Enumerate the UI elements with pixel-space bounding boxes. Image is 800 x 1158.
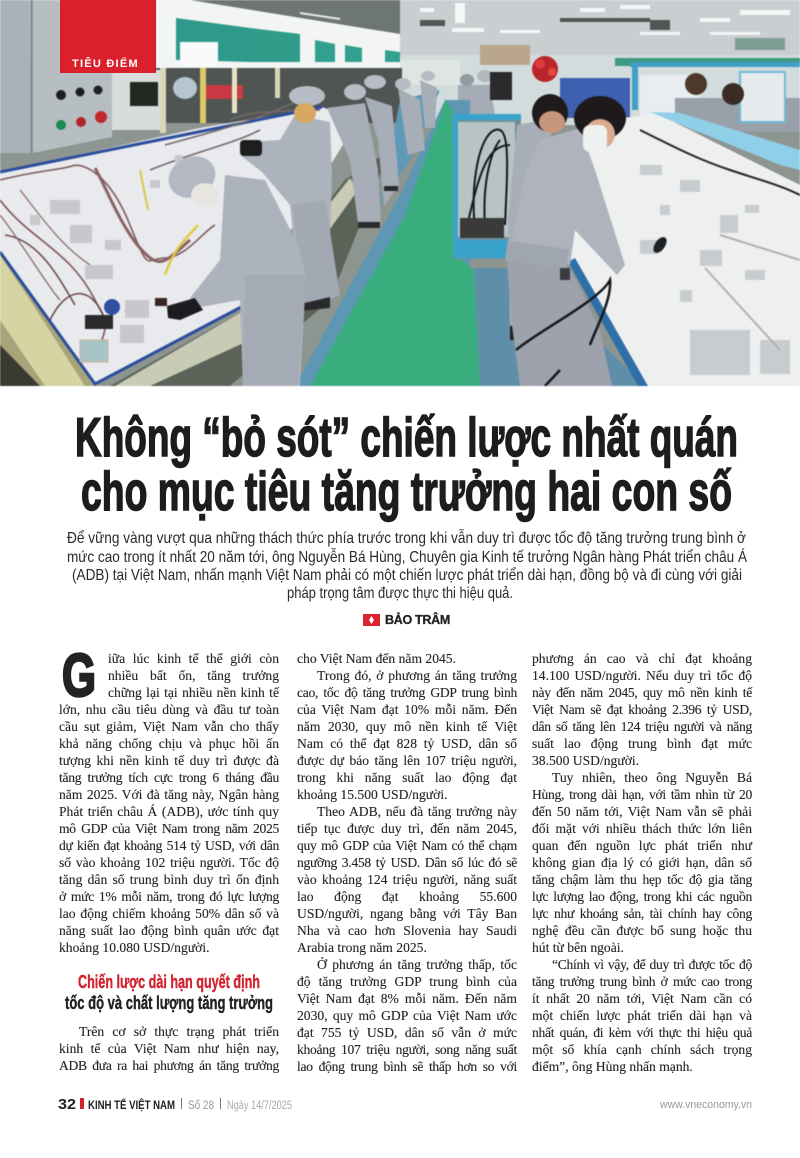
footer bbox=[58, 1096, 752, 1113]
article column 2: Việt Nam đạt 8% mỗi năm. Đến năm bbox=[297, 991, 517, 1006]
article column 1: dự kiến đạt khoảng 514 tỷ USD, với dân bbox=[59, 838, 279, 853]
article column 1: năng suất lao động bình quân ước đạt bbox=[59, 923, 279, 938]
article column 3: lực như khoáng sản, tài chính hay công bbox=[532, 906, 752, 921]
article column 3: tăng chậm làm thu hẹp tốc độ gia tăng bbox=[532, 872, 752, 887]
article column 1: tăng dân số trung bình duy trì ổn định bbox=[59, 872, 279, 887]
article column 3: phương án cao và chỉ đạt khoảng bbox=[532, 651, 752, 666]
article column 1: mô GDP của Việt Nam trong năm 2025 bbox=[59, 821, 279, 836]
article column 2: quy mô GDP của Việt Nam có thể chạm bbox=[297, 838, 517, 853]
article column 1: năm 2025. Với đà tăng này, Ngân hàng bbox=[59, 787, 279, 802]
footer: www.vneconomy.vn bbox=[659, 1099, 752, 1111]
article column 2: USD/người, ngang bằng với Tây Ban bbox=[297, 906, 517, 921]
article column 2: lao động đạt khoảng 55.600 bbox=[297, 889, 517, 904]
article column 3: suất lao động trung bình đạt mức bbox=[532, 736, 752, 751]
article column 2: Theo ADB, nếu đà tăng trưởng này bbox=[317, 804, 517, 819]
article column 2: lao động trung bình sẽ thấp hơn so với bbox=[297, 1059, 517, 1074]
article column 1: số vào khoảng 102 triệu người. Tốc độ bbox=[59, 855, 279, 870]
article column 2: Nha và cao hơn Slovenia hay Saudi bbox=[297, 923, 517, 938]
byline: BẢO TRÂM bbox=[385, 613, 450, 627]
article column 3 bbox=[532, 651, 753, 1074]
far workers row bbox=[327, 80, 437, 226]
article column 1: tượng khi nền kinh tế duy trì được đà bbox=[59, 753, 279, 768]
article column 3: Tuy nhiên, theo ông Nguyễn Bá bbox=[552, 770, 752, 785]
article column 3: một số khía cạnh chính sách trọng bbox=[532, 1042, 752, 1057]
article column 3: này đến năm 2045, quy mô nền kinh tế bbox=[532, 685, 752, 700]
article column 2: cho Việt Nam đến năm 2045. bbox=[297, 651, 456, 666]
hero photo: wiring harness factory line bbox=[0, 0, 800, 387]
article column 3: Hùng, trong dài hạn, với tầm nhìn từ 20 bbox=[532, 787, 752, 802]
right background bbox=[400, 55, 800, 125]
article column 3: “Chính vì vậy, để duy trì được tốc độ bbox=[552, 957, 752, 972]
article column 3: quan đến nguồn lực phát triển như bbox=[532, 838, 752, 853]
article column 3: đối mặt với nhiều thách thức lớn liên bbox=[532, 821, 752, 836]
article column 1: nhiều bất ổn, tăng trưởng bbox=[108, 668, 279, 683]
control cabinet bbox=[0, 0, 112, 153]
subheading bbox=[65, 971, 273, 1014]
right board bbox=[568, 115, 800, 386]
article column 3: lực lượng lao động, trong khi các nguồn bbox=[532, 889, 752, 904]
background workers bbox=[458, 85, 495, 115]
article column 3: hút từ bên ngoài. bbox=[532, 940, 624, 955]
article column 3: đến 50 năm tới, Việt Nam vẫn sẽ phải bbox=[532, 804, 752, 819]
article column 1: lớn, nhu cầu tiêu dùng và đầu tư toàn bbox=[59, 702, 279, 717]
article column 1 continuation: ADB đưa ra hai phương án tăng trưởng bbox=[59, 1058, 279, 1073]
article column 2: Trong đó, ở phương án tăng trưởng bbox=[317, 668, 517, 683]
article column 3: 14.100 USD/người. Nếu duy trì tốc độ bbox=[532, 668, 752, 683]
article column 1: chững lại tại nhiều nền kinh tế bbox=[108, 685, 279, 700]
left background banners bbox=[156, 0, 400, 68]
standfirst bbox=[67, 528, 747, 602]
article column 1: ở mức 1% mỗi năm, trong đó lực lượng bbox=[59, 889, 279, 904]
blue cart with wires bbox=[453, 114, 521, 259]
article column 1: khả năng chống chịu và phục hồi ấn bbox=[59, 736, 279, 751]
article column 2: đạt 755 tỷ USD, dân số vẫn ở mức bbox=[297, 1025, 517, 1040]
article column 2: trong khi năng suất lao động đạt bbox=[297, 770, 517, 785]
article column 3: điểm”, ông Hùng nhấn mạnh. bbox=[532, 1059, 693, 1074]
article column 2: Ở phương án tăng trưởng thấp, tốc bbox=[317, 957, 517, 972]
article column 1: khoảng 10.080 USD/người. bbox=[59, 940, 210, 955]
article column 2: Nam có thể đạt 828 tỷ USD, dân số bbox=[297, 736, 517, 751]
footer: Ngày 14/7/2025 bbox=[227, 1100, 292, 1112]
worker 1 bbox=[162, 149, 306, 386]
article column 2: khoảng 15.500 USD/người. bbox=[297, 787, 448, 802]
article column 3: một chiến lược phát triển dài hạn và bbox=[532, 1008, 752, 1023]
article column 2: khoảng 107 triệu người, song năng suất bbox=[297, 1042, 517, 1057]
article column 1: tăng trưởng tích cực trong 6 tháng đầu bbox=[59, 770, 279, 785]
article column 2: độ tăng trưởng GDP trung bình của bbox=[297, 974, 517, 989]
article column 3: ít nhất 20 năm tới, Việt Nam cần có bbox=[532, 991, 752, 1006]
flowers bbox=[532, 56, 558, 82]
article column 3: không gian địa lý có giới hạn, dân số bbox=[532, 855, 752, 870]
worker 2 bbox=[240, 86, 340, 311]
article column 3: dân số tăng lên 124 triệu người và năng bbox=[532, 719, 752, 734]
article column 2: Arabia trong năm 2025. bbox=[297, 940, 427, 955]
article column 3: tăng trưởng trung bình ở mức cao trong bbox=[532, 974, 752, 989]
article column 2: của Việt Nam đạt 10% mỗi năm. Đến bbox=[297, 702, 517, 717]
byline bbox=[363, 612, 450, 627]
article column 2: tiếp tục được duy trì, đến năm 2045, bbox=[297, 821, 517, 836]
article column 3: 38.500 USD/người. bbox=[532, 753, 639, 768]
article column 1 continuation bbox=[59, 1024, 280, 1073]
article column 1 continuation: Trên cơ sở thực trạng phát triển bbox=[79, 1024, 279, 1039]
article column 3: nhất quán, đi kèm với thực thi hiệu quả bbox=[532, 1025, 752, 1040]
article column 1: lao động chiếm khoảng 50% dân số và bbox=[59, 906, 279, 921]
article column 1: cầu sụt giảm, Việt Nam vẫn cho thấy bbox=[59, 719, 279, 734]
footer: Số 28 bbox=[188, 1100, 214, 1112]
footer: 32 bbox=[58, 1096, 76, 1113]
article column 3: Việt Nam sẽ đạt khoảng 2.396 tỷ USD, bbox=[532, 702, 752, 717]
article column 2: vào khoảng 124 triệu người, năng suất bbox=[297, 872, 517, 887]
standfirst: pháp trọng tâm được thực thi hiệu quả. bbox=[287, 585, 513, 602]
article column 3: nghệ đều cần được bổ sung hoặc thu bbox=[532, 923, 752, 938]
title bbox=[75, 406, 738, 522]
right workers bbox=[505, 94, 626, 386]
article column 2: ngưỡng 3.458 tỷ USD. Dân số lúc đó sẽ bbox=[297, 855, 517, 870]
section tag bbox=[60, 0, 156, 73]
article column 2: cao, tốc độ tăng trưởng GDP trung bình bbox=[297, 685, 517, 700]
section tag: TIÊU ĐIỂM bbox=[72, 58, 139, 70]
icon: author marker bbox=[363, 614, 380, 626]
article column 2: năm 2030, quy mô nền kinh tế Việt bbox=[297, 719, 517, 734]
article column 2 bbox=[296, 651, 518, 1074]
article column 1 bbox=[59, 651, 280, 955]
article column 1: Phát triển châu Á (ADB), ước tính quy bbox=[59, 804, 279, 819]
article column 2: được dự báo tăng lên 107 triệu người, bbox=[297, 753, 517, 768]
left board bbox=[0, 255, 100, 386]
article column 1: iữa lúc kinh tế thế giới còn bbox=[108, 651, 279, 666]
article column 1 continuation: kinh tế của Việt Nam như hiện nay, bbox=[59, 1041, 279, 1056]
floor bbox=[295, 100, 470, 386]
footer: KINH TẾ VIỆT NAM bbox=[88, 1097, 175, 1112]
article column 2: 2030, quy mô GDP của Việt Nam ước bbox=[297, 1008, 517, 1023]
